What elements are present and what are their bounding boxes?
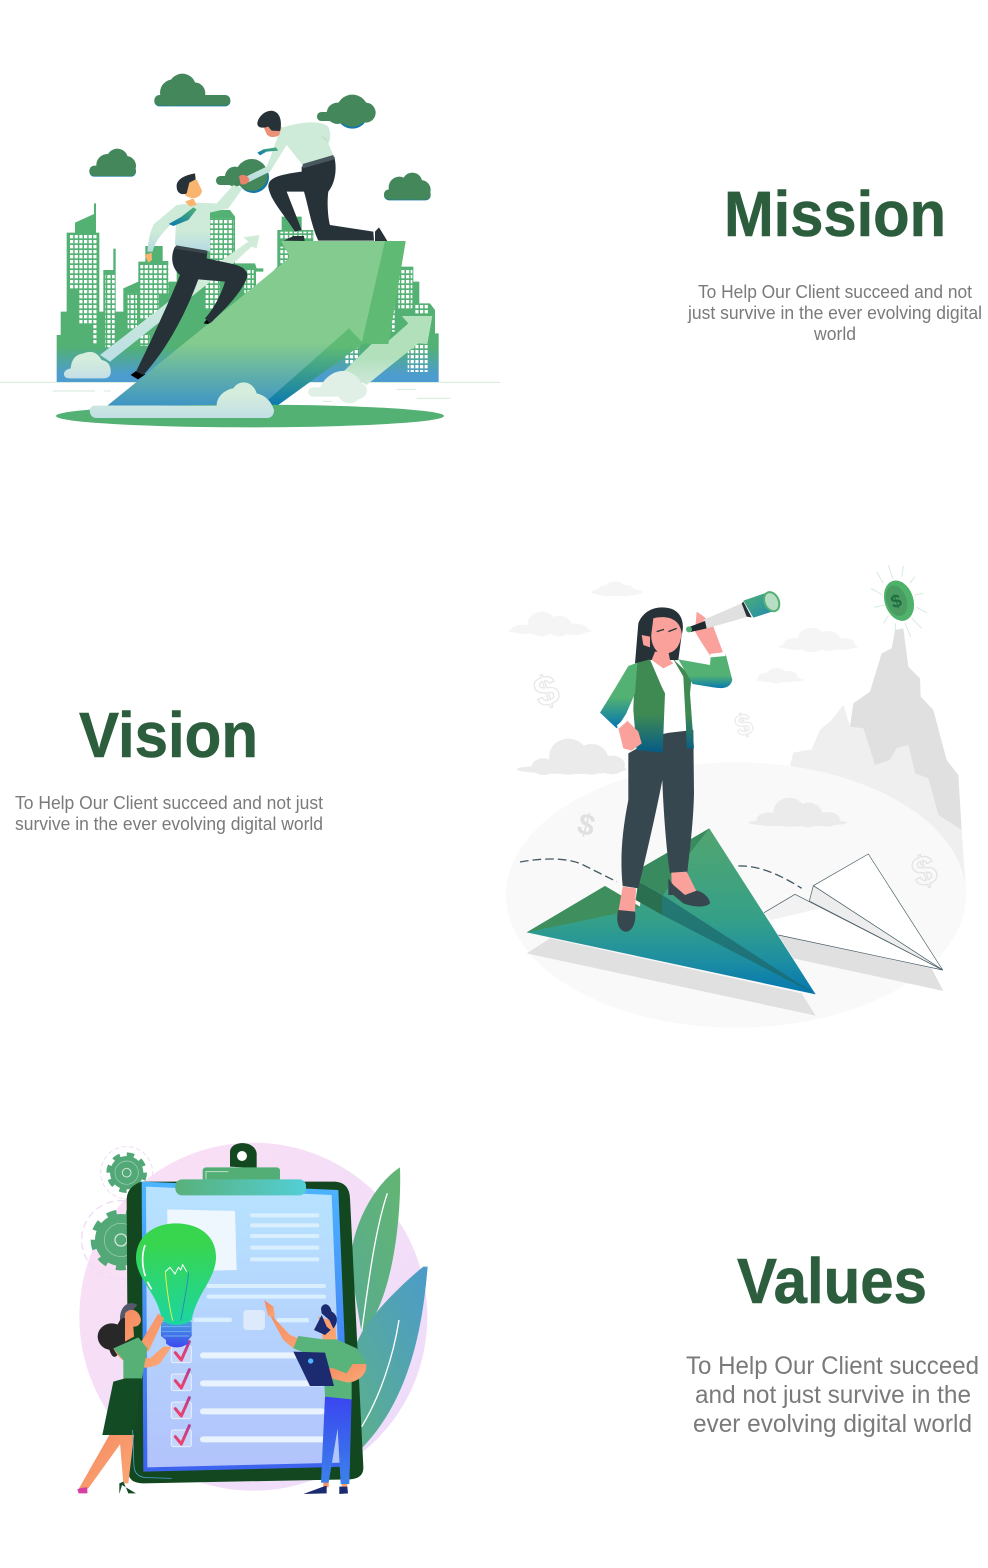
back arrow [100,235,259,362]
text: mission description: just survive in the ever evolving digital [687,303,982,323]
dollar symbols: $ [574,807,599,844]
text: values description: and not just survive in the [695,1381,971,1409]
sky clouds [89,74,431,200]
woman with telescope [600,607,732,932]
heading: Vision: Vision [79,699,258,771]
dollar symbols: $ [731,707,757,744]
illustration: vision, woman with telescope on a paper plane [506,565,966,1028]
grey clouds [508,581,858,827]
dollar coin with rays: $ [888,589,904,612]
illustration: mission, two businessmen climbing a green arrow [0,74,500,427]
paper [142,1182,350,1472]
telescope [686,590,782,632]
white paper plane [764,854,943,970]
right small arrow [343,316,432,385]
climbing man [131,173,247,379]
floor ellipse [506,762,966,1028]
woman holding bulb [77,1303,172,1494]
clipboard bottom highlight [133,1430,172,1478]
dollar symbols [528,665,942,896]
clipboard board [127,1182,363,1483]
illustration: values, clipboard with light bulb and two people [77,1143,428,1494]
dollar coin with rays [871,565,927,637]
text: mission description: world [813,324,856,344]
dashed flight path [520,859,802,888]
heading: Values: Values [737,1245,927,1317]
gears [82,1147,160,1279]
helping man [239,111,387,241]
mountains [790,628,966,893]
text: mission description: To Help Our Client succeed and not [698,282,972,302]
green paper plane [527,828,816,994]
document content [167,1209,326,1442]
large green arrow [107,241,406,407]
horizon line [0,382,500,401]
man with tablet [264,1300,366,1494]
dollar symbols: $ [906,845,942,896]
text: values description [686,1352,979,1438]
check boxes [171,1342,191,1447]
dollar symbols: $ [528,665,565,716]
pink circle [79,1143,427,1491]
clip bar [175,1179,306,1195]
ground ellipse [56,405,444,427]
plane shadows [527,938,816,1016]
text: vision description [15,793,323,834]
text: mission description [687,282,982,344]
puffs of cloud [64,352,367,418]
text: vision description: survive in the ever evolving digital world [15,814,323,834]
light bulb [136,1223,216,1347]
text: values description: ever evolving digital world [693,1410,972,1438]
clip [203,1143,280,1184]
leaves [350,1167,428,1450]
heading: Mission: Mission [724,178,946,250]
text: values description: To Help Our Client succeed [686,1352,979,1380]
city skyline [57,203,439,382]
text: vision description: To Help Our Client succeed and not just [15,793,323,813]
